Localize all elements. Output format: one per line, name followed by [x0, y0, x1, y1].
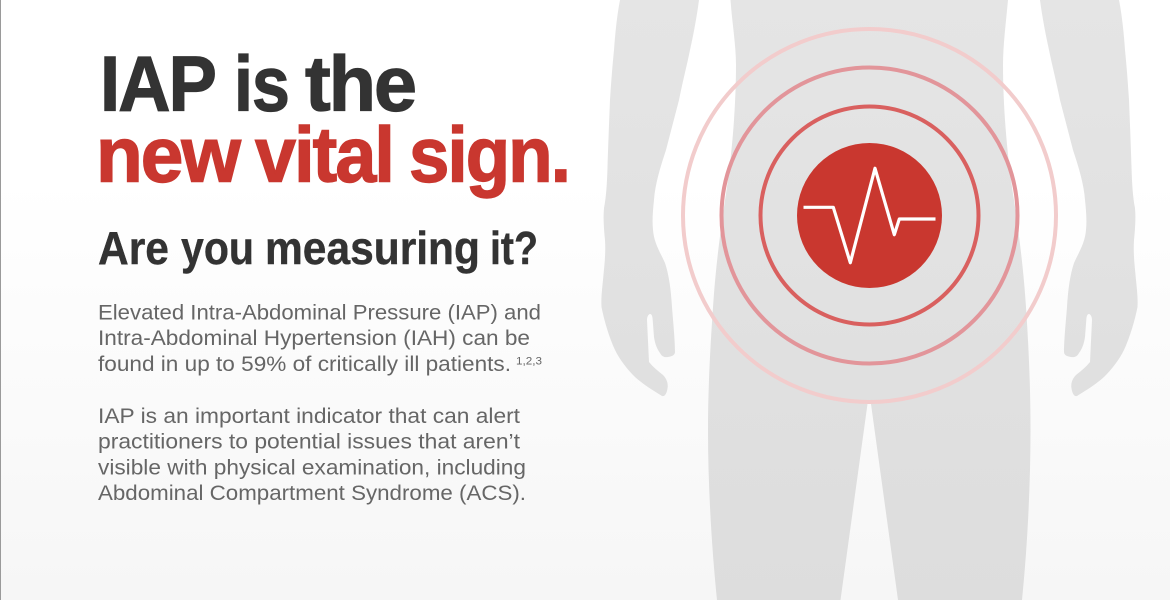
subheading: it?	[490, 222, 538, 274]
title line one: is	[234, 40, 289, 128]
subheading	[98, 222, 538, 274]
paragraph: clinical importance: visible with physical examination, including	[98, 456, 526, 480]
subheading: measuring	[265, 222, 480, 274]
title line two: sign.	[409, 111, 569, 199]
subheading: you	[181, 222, 254, 274]
paragraph: prevalence	[98, 300, 542, 376]
right arm and hand	[1040, 0, 1138, 396]
title	[96, 40, 569, 199]
paragraph: prevalence: Intra-Abdominal Hypertension (IAH) can be	[98, 326, 530, 350]
outer ring	[683, 29, 1056, 402]
paragraph: prevalence: found in up to 59% of critically ill patients.	[98, 352, 511, 376]
title line one: the	[305, 40, 415, 128]
paragraph: clinical importance	[98, 404, 526, 505]
icon: heartbeat badge	[797, 143, 942, 288]
paragraph: clinical importance: practitioners to potential issues that aren’t	[98, 430, 520, 454]
pulse rings	[683, 29, 1056, 402]
title line one	[100, 40, 415, 128]
title line two	[96, 111, 569, 199]
paragraph: clinical importance: Abdominal Compartment Syndrome (ACS).	[98, 481, 526, 505]
paragraph: clinical importance: IAP is an important indicator that can alert	[98, 404, 520, 428]
title line two: vital	[255, 111, 393, 199]
inner ring	[760, 106, 978, 324]
body silhouette	[601, 0, 1138, 600]
left arm and hand	[601, 0, 699, 396]
title line one: IAP	[100, 40, 215, 128]
paragraph: prevalence: Elevated Intra-Abdominal Pressure (IAP) and	[98, 300, 541, 324]
paragraph: prevalence: 1,2,3	[516, 356, 542, 368]
subheading: Are	[98, 222, 169, 274]
middle ring	[722, 68, 1018, 364]
title line two: new	[96, 111, 241, 199]
torso and legs	[708, 0, 1030, 600]
